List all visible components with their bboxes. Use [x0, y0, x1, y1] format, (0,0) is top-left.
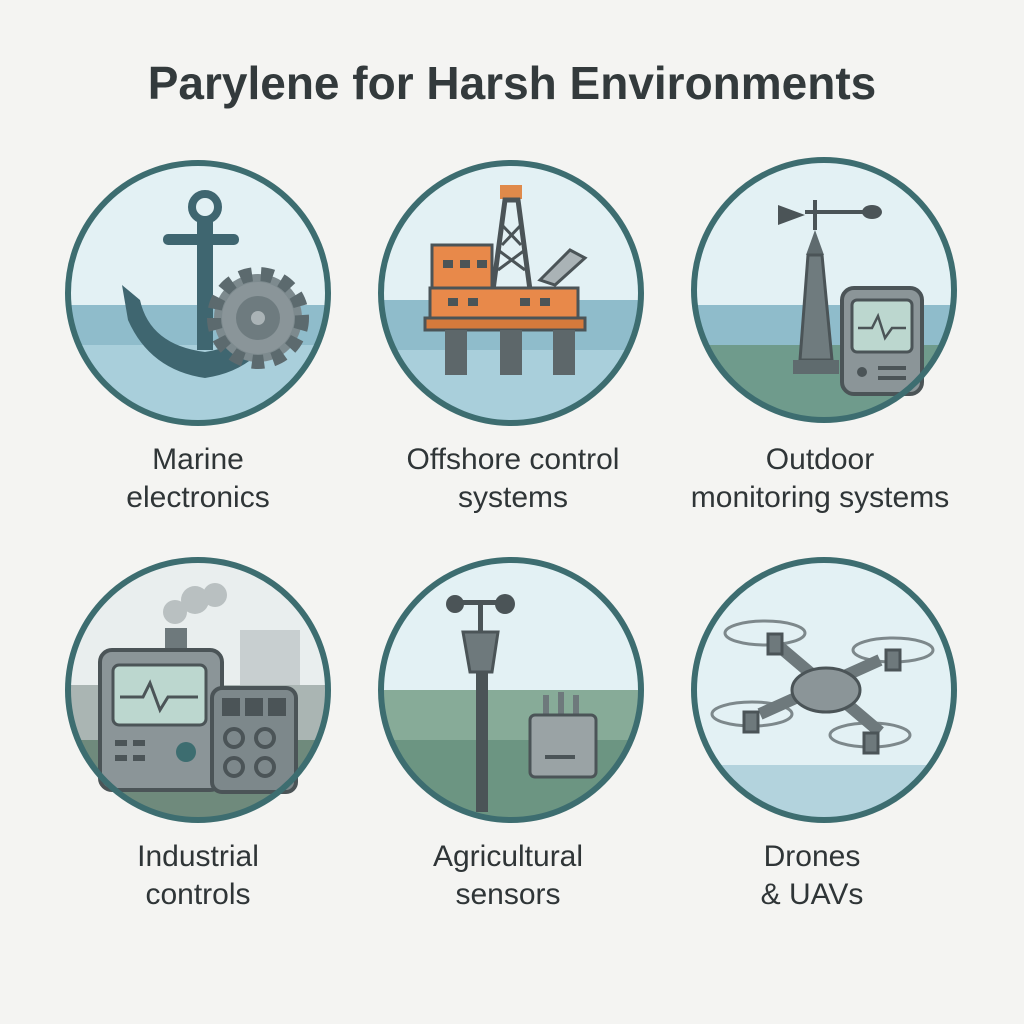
label: drones: & UAVs — [761, 878, 863, 911]
label: agricultural — [433, 840, 583, 911]
label: offshore — [407, 443, 619, 514]
panel: offshore — [370, 160, 650, 440]
icon: oil rig — [425, 185, 585, 375]
label: marine: Marine — [152, 443, 244, 476]
icon: anchor — [122, 194, 285, 378]
label: industrial — [137, 840, 259, 911]
panel: marine electronics — [65, 160, 331, 426]
panel: industrial controls — [65, 557, 331, 823]
icon: control panel — [100, 628, 296, 792]
label: drones — [761, 840, 863, 911]
label: outdoor: monitoring systems — [691, 481, 949, 514]
icon: monitor device — [842, 288, 922, 394]
label: agricultural: sensors — [455, 878, 561, 911]
panel: outdoor monitoring — [691, 157, 957, 423]
panel: drones — [691, 557, 957, 823]
panel: agricultural sensors — [378, 557, 644, 823]
icon: weather tower — [778, 200, 882, 374]
label: drones: Drones — [764, 840, 860, 873]
icon: drone — [712, 621, 933, 753]
label: outdoor: Outdoor — [766, 443, 874, 476]
label: outdoor — [691, 443, 949, 514]
label: offshore: systems — [458, 481, 568, 514]
icon: sensor box — [530, 692, 596, 777]
label: industrial: controls — [145, 878, 251, 911]
label: industrial: Industrial — [137, 840, 259, 873]
label: offshore: Offshore control — [407, 443, 619, 476]
title: Parylene for Harsh Environments — [148, 57, 876, 109]
label: marine — [126, 443, 270, 514]
icon: smoke — [163, 583, 227, 624]
label: marine: electronics — [126, 481, 270, 514]
label: agricultural: Agricultural — [433, 840, 583, 873]
icon: gear — [214, 274, 302, 362]
icon: sensor pole — [446, 594, 515, 812]
